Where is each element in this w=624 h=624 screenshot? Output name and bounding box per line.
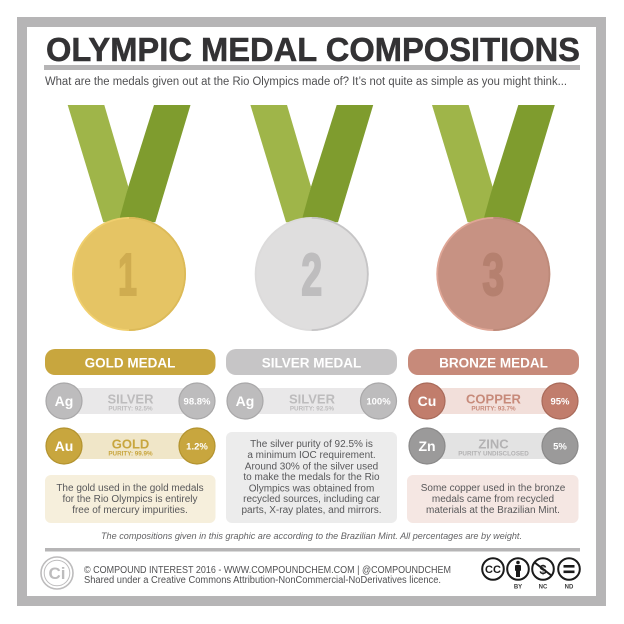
- row: copper in bronze medal: COPPER: [466, 392, 522, 406]
- text block: bronze note: [407, 475, 578, 523]
- footer credits: © COMPOUND INTEREST 2016 - WWW.COMPOUNDCHEM.COM | @COMPOUNDCHEM: [84, 565, 451, 576]
- text block: gold note: for the Rio Olympics is entirely: [62, 494, 198, 505]
- footer credits: [84, 565, 451, 586]
- row: gold in gold medal: 1.2%: [186, 442, 208, 452]
- footnote: The compositions given in this graphic are according to the Brazilian Mint. All percentages are by weight.: [101, 531, 522, 541]
- panel: bronze medal: [407, 349, 579, 523]
- row: silver in silver medal: SILVER: [289, 392, 336, 406]
- row: silver in silver medal: [227, 383, 396, 419]
- text block: gold note: free of mercury impurities.: [72, 505, 188, 516]
- gold medal illustration: [68, 105, 190, 331]
- icon: attribution: BY: [514, 584, 522, 590]
- row: silver in silver medal: PURITY: 92.5%: [290, 406, 335, 412]
- footer credits: Shared under a Creative Commons Attribution-NonCommercial-NoDerivatives licence.: [84, 575, 441, 586]
- ribbon: [68, 105, 190, 222]
- heading: gold medal: [45, 349, 216, 375]
- text block: gold note: [45, 475, 216, 523]
- ribbon: [250, 105, 373, 222]
- row: gold in gold medal: GOLD: [112, 436, 149, 452]
- row: copper in bronze medal: PURITY: 93.7%: [471, 406, 516, 412]
- text block: bronze note: materials at the Brazilian Mint.: [426, 505, 560, 516]
- icon: no derivatives: ND: [565, 584, 574, 590]
- medal disc: 3: [482, 242, 504, 308]
- panel: silver medal: [226, 349, 397, 523]
- icon: non-commercial: NC: [539, 584, 548, 590]
- silver medal illustration: [250, 105, 373, 331]
- medal disc: [255, 217, 369, 331]
- row: silver in gold medal: SILVER: [108, 392, 154, 406]
- row: zinc in bronze medal: PURITY UNDISCLOSED: [458, 450, 529, 458]
- heading: silver medal: [226, 349, 397, 375]
- row: silver in silver medal: Ag: [236, 393, 254, 409]
- row: silver in silver medal: 100%: [366, 396, 391, 408]
- row: copper in bronze medal: [409, 383, 578, 419]
- text block: silver note: a minimum IOC requirement.: [247, 450, 376, 461]
- row: zinc in bronze medal: 5%: [553, 442, 567, 452]
- row: gold in gold medal: [46, 428, 215, 464]
- heading: bronze medal: BRONZE MEDAL: [439, 356, 548, 370]
- row: zinc in bronze medal: Zn: [418, 438, 436, 454]
- row: gold in gold medal: Au: [55, 438, 73, 454]
- medal disc: [436, 217, 550, 331]
- row: zinc in bronze medal: ZINC: [478, 436, 509, 452]
- text block: bronze note: medals came from recycled: [432, 494, 554, 505]
- panel: gold medal: [45, 349, 216, 523]
- icon: cc: CC: [485, 564, 501, 576]
- row: silver in gold medal: [46, 383, 215, 419]
- text block: silver note: The silver purity of 92.5% is: [250, 439, 373, 450]
- row: silver in gold medal: PURITY: 92.5%: [108, 406, 153, 412]
- text block: silver note: Olympics was obtained from: [249, 484, 374, 494]
- row: silver in gold medal: Ag: [55, 393, 73, 409]
- text block: silver note: Around 30% of the silver used: [245, 462, 378, 472]
- subtitle: What are the medals given out at the Rio Olympics made of? It’s not quite as simple as you might think...: [45, 76, 567, 88]
- ribbon: [432, 105, 555, 222]
- bronze medal illustration: [432, 105, 555, 331]
- row: silver in gold medal: 98.8%: [184, 396, 211, 408]
- text block: silver note: to make the medals for the Rio: [243, 472, 380, 483]
- title: OLYMPIC MEDAL COMPOSITIONS: [46, 32, 580, 69]
- icon: non-commercial: [532, 558, 554, 590]
- text block: silver note: recycled sources, including car: [243, 494, 381, 505]
- row: gold in gold medal: PURITY: 99.9%: [108, 450, 153, 458]
- medal disc: 1: [118, 242, 137, 308]
- heading: gold medal: GOLD MEDAL: [85, 356, 175, 370]
- heading: bronze medal: [408, 349, 579, 375]
- row: copper in bronze medal: 95%: [550, 396, 570, 408]
- text block: silver note: parts, X-ray plates, and mirrors.: [241, 505, 382, 516]
- text block: silver note: [226, 432, 397, 523]
- icon: creative commons licence badges: [482, 558, 580, 590]
- row: zinc in bronze medal: [409, 428, 578, 464]
- text block: bronze note: Some copper used in the bronze: [421, 483, 566, 494]
- text block: gold note: The gold used in the gold medals: [56, 483, 204, 494]
- row: copper in bronze medal: Cu: [418, 393, 436, 409]
- icon: compound interest logo: Ci: [48, 564, 66, 583]
- icon: compound interest logo: [41, 557, 73, 589]
- medal disc: 2: [301, 242, 322, 308]
- medal disc: [72, 217, 186, 331]
- icon: non-commercial: $: [539, 562, 547, 577]
- heading: silver medal: SILVER MEDAL: [262, 356, 361, 370]
